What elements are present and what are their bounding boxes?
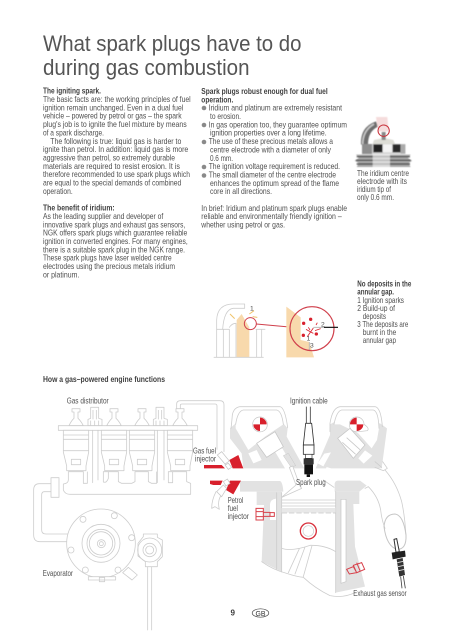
evaporator: [67, 509, 137, 582]
text block: no deposits: 2 Build-up of: [357, 304, 396, 313]
title: [43, 31, 302, 80]
country badge: GB: GB: [256, 609, 266, 618]
bullet list: to erosion.: [210, 112, 241, 121]
label: petrol fuel injector: fuel: [228, 504, 238, 513]
bullet list: The small diameter of the centre electrode: [209, 170, 336, 180]
title: during gas combustion: [43, 55, 250, 80]
text block: the igniting spark: therefore recommended to use spark plugs which: [43, 170, 190, 179]
diagram: annular gap deposits: [214, 304, 338, 357]
bullet list: enhances the optimum spread of the flame: [210, 179, 339, 188]
magnified circle: [286, 307, 338, 357]
piston: [262, 500, 355, 597]
bullet list: [202, 104, 347, 196]
magnified circle: 3: [310, 342, 314, 349]
page number: 9: [230, 608, 236, 618]
petrol fuel injector: [210, 479, 241, 509]
pipe to engine: [177, 401, 224, 452]
exhaust gas sensor: [392, 539, 406, 588]
spark plug: [303, 407, 314, 477]
text block: no deposits: [357, 279, 412, 345]
text block: no deposits: burnt in the: [363, 328, 397, 337]
caption: iridium centre electrode: electrode with its: [357, 177, 407, 186]
text block: in brief: [200, 204, 347, 230]
left head: [230, 407, 304, 482]
gas fuel injector: [204, 452, 243, 469]
country badge: GB: [252, 609, 269, 618]
text block: no deposits: 3 The deposits are: [357, 320, 409, 329]
block and cylinder walls: [240, 481, 367, 593]
text block: no deposits: No deposits in the: [357, 279, 412, 288]
label: petrol fuel injector: Petrol: [228, 496, 243, 505]
red sensors: [256, 508, 365, 574]
text block: the benefit of iridium: or platinum.: [43, 270, 79, 279]
bullet list: 0.6 mm.: [210, 154, 233, 163]
title: What spark plugs have to do: [43, 31, 302, 56]
label: petrol fuel injector: [228, 496, 249, 521]
exhaust pipes: [365, 462, 406, 537]
valves: [282, 466, 302, 497]
diagram: gas system: [34, 401, 224, 630]
label: gas distributor: Gas distributor: [67, 396, 109, 406]
magnified circle: 1: [307, 336, 311, 343]
label: gas fuel injector: [193, 446, 216, 464]
label: ignition cable: Ignition cable: [290, 396, 328, 406]
right head: [316, 407, 387, 489]
text block: the benefit of iridium: These spark plugs have laser welded centre: [43, 254, 172, 263]
text block: the igniting spark: The following is true: liquid gas is harder to: [50, 137, 182, 146]
text block: spark plugs robust enough: operation.: [201, 95, 233, 104]
label: petrol fuel injector: injector: [228, 512, 249, 521]
label: gas fuel injector: Gas fuel: [193, 446, 216, 456]
text block: no deposits: deposits: [363, 312, 386, 321]
text block: in brief: In brief: Iridium and platinum spark plugs enable: [201, 204, 347, 213]
text block: the benefit of iridium: As the leading supplier and developer of: [43, 212, 164, 221]
text block: the igniting spark: vehicle – powered by petrol or gas – the spark: [43, 112, 182, 121]
caption: iridium centre electrode: [357, 169, 409, 202]
bullet list: ignition properties over a long lifetime.: [210, 129, 327, 138]
diagram: engine: [204, 407, 406, 597]
text block: the igniting spark: of a spark discharge.: [43, 128, 104, 137]
label: gas fuel injector: injector: [195, 454, 216, 464]
text block: no deposits: annular gap.: [357, 288, 394, 297]
text block: the igniting spark: The basic facts are: the working principles of fuel: [43, 95, 191, 104]
text block: spark plugs robust enough: [201, 87, 347, 196]
oval loop: [384, 514, 406, 549]
bullet list: Iridium and platinum are extremely resistant: [209, 104, 343, 113]
heading: how a gas-powered engine functions: How a gas–powered engine functions: [43, 375, 165, 384]
text block: the benefit of iridium: electrodes using the precious metals iridium: [43, 262, 175, 271]
text block: the benefit of iridium: there is a suitable spark plug in the NGK range.: [43, 245, 185, 254]
caption: iridium centre electrode: iridium tip of: [357, 185, 392, 194]
caption: iridium centre electrode: The iridium centre: [357, 169, 409, 178]
photo: spark plug tip: [355, 117, 412, 167]
text block: the igniting spark: [43, 87, 191, 196]
feed pipe: [34, 484, 68, 542]
text block: spark plugs robust enough: Spark plugs robust enough for dual fuel: [201, 87, 328, 96]
text block: in brief: whether using petrol or gas.: [200, 220, 285, 230]
bullet list: centre electrode with a diameter of only: [210, 145, 332, 154]
magnified circle: 2: [321, 322, 325, 329]
text block: no deposits: annular gap: [363, 336, 396, 345]
cylinder head: [230, 407, 387, 489]
caption: iridium centre electrode: only 0.6 mm.: [357, 193, 394, 202]
text block: the igniting spark: plug's job is to ignite the fuel mixture by means: [43, 120, 187, 129]
cam lobes: [253, 417, 368, 432]
text block: the igniting spark: aggressive than petrol, so extremely durable: [43, 154, 175, 162]
bullet list: core in all directions.: [210, 187, 272, 196]
text block: the benefit of iridium: NGK offers spark plugs which guarantee reliable: [43, 229, 188, 238]
gas distributor: [58, 407, 198, 494]
text block: the benefit of iridium: The benefit of iridium:: [43, 204, 115, 213]
text block: the benefit of iridium: ignition in converted engines. For many engines,: [43, 237, 188, 246]
text block: the igniting spark: are equal to the special demands of combined: [43, 178, 181, 188]
label: spark plug: Spark plug: [296, 478, 326, 487]
text block: the igniting spark: materials are required to resist erosion. It is: [43, 162, 180, 171]
text block: the benefit of iridium: innovative spark plugs and exhaust gas sensors,: [43, 220, 185, 229]
bullet list: The use of these precious metals allows a: [209, 137, 333, 146]
text block: the igniting spark: ignition remain unchanged. Even in a dual fuel: [43, 103, 183, 112]
text block: the igniting spark: operation.: [43, 187, 73, 196]
text block: the benefit of iridium: [43, 204, 188, 279]
text block: no deposits: 1 Ignition sparks: [357, 296, 404, 305]
solenoid valve: [138, 534, 162, 630]
bullet list: In gas operation too, they guarantee optimum: [209, 120, 347, 129]
plug section: 1: [250, 306, 254, 313]
label: evaporator: Evaporator: [43, 569, 73, 578]
label: exhaust gas sensor: Exhaust gas sensor: [353, 589, 407, 598]
bullet list: The ignition voltage requirement is reduced.: [209, 162, 340, 171]
text block: the igniting spark: ignite than petrol. In addition: liquid gas is more: [43, 145, 189, 154]
text block: in brief: reliable and environmentally friendly ignition –: [201, 212, 342, 221]
text block: the igniting spark: The igniting spark.: [43, 87, 101, 96]
